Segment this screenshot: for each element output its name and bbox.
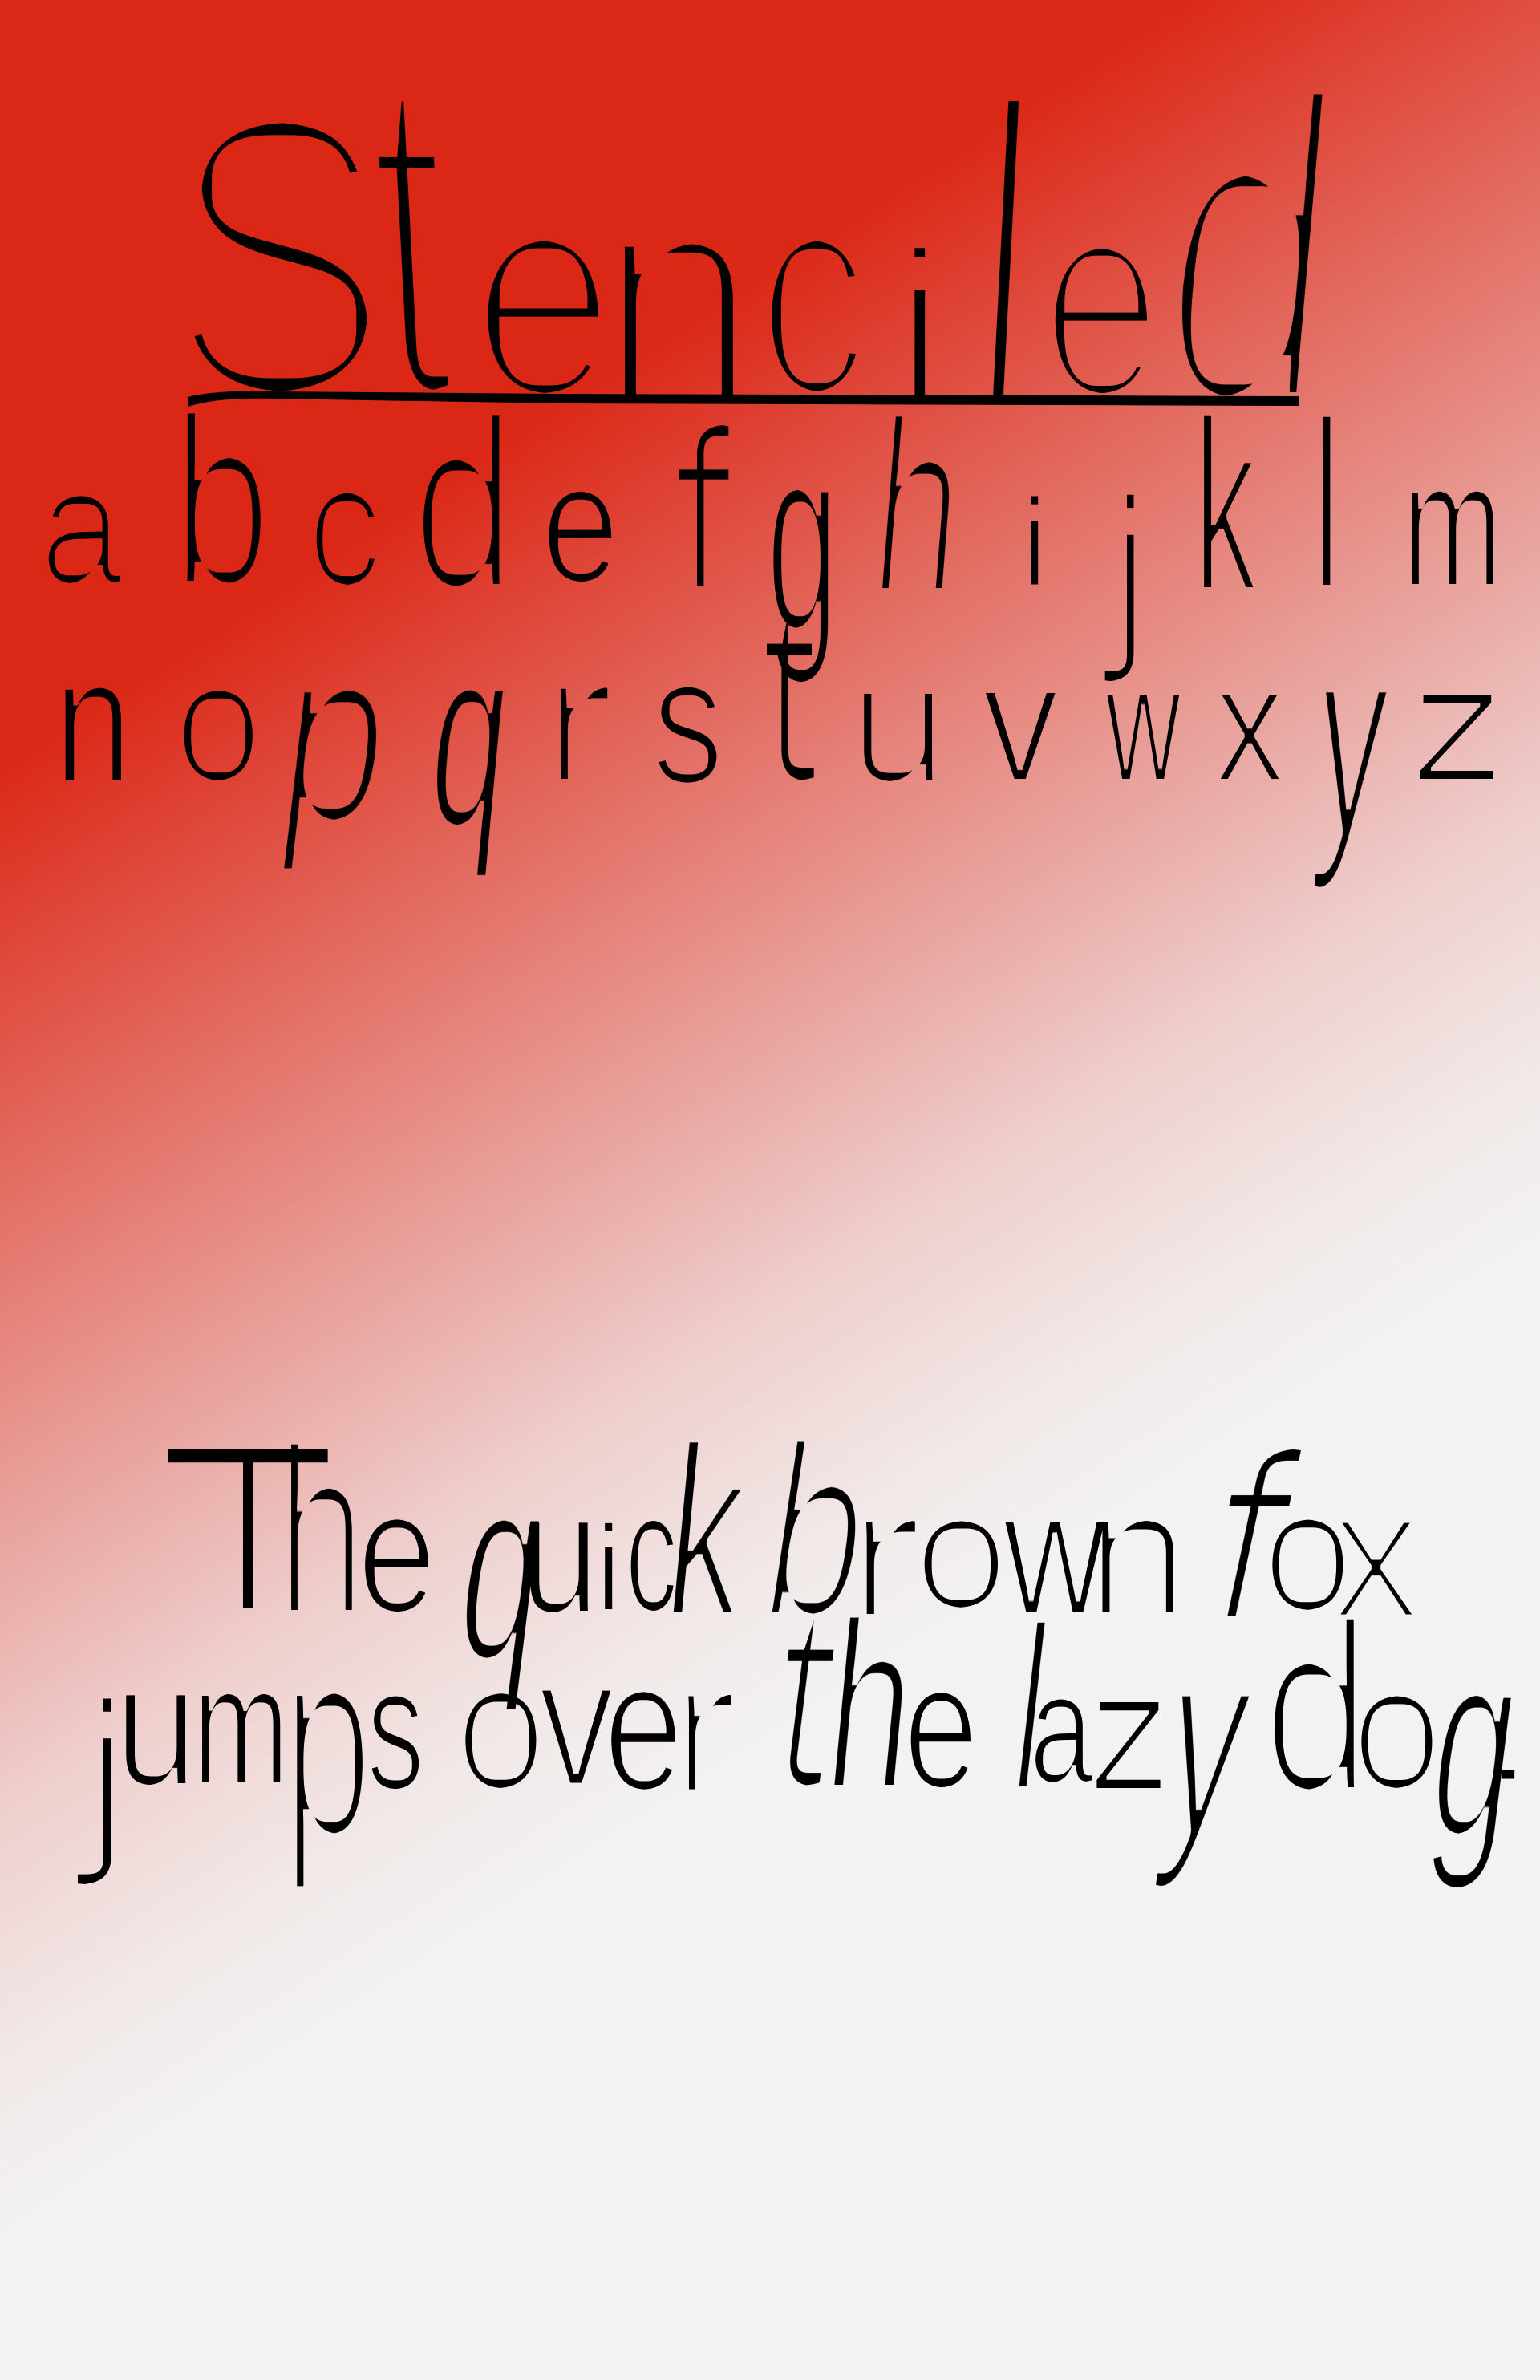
pangram line 2: jumps over the lazy dog.: d — [1261, 1575, 1372, 1841]
alphabet row: a to m: b — [171, 368, 273, 634]
alphabet row: n to z: q — [419, 595, 523, 880]
alphabet row: n to z: o — [173, 627, 263, 817]
alphabet row: a to m: e — [541, 429, 619, 618]
title underline — [188, 391, 1299, 407]
title: Stenciled: e — [470, 124, 617, 460]
alphabet row: a to m: g — [766, 391, 839, 687]
title: Stenciled: i — [889, 205, 951, 446]
pangram line 2: jumps over the lazy dog.: o — [454, 1626, 548, 1826]
pangram line 2: jumps over the lazy dog.: r — [667, 1626, 742, 1831]
title: Stenciled — [164, 0, 1361, 497]
pangram line 1: The quick brown fox: h — [276, 1401, 367, 1663]
pangram line 1: The quick brown fox: b — [748, 1396, 888, 1665]
alphabet row: n to z: u — [848, 630, 949, 817]
pangram line 2: jumps over the lazy dog.: g — [1416, 1596, 1536, 1893]
alphabet row: n to z: z — [1407, 631, 1509, 816]
pangram line 2: jumps over the lazy dog.: e — [603, 1622, 684, 1829]
alphabet row: a to m: l — [1304, 373, 1349, 639]
title: Stenciled: e — [1040, 138, 1162, 457]
alphabet row: a to m: h — [863, 371, 974, 643]
pangram line 2: jumps over the lazy dog.: z — [1085, 1637, 1173, 1826]
alphabet row: n to z: w — [1104, 631, 1182, 816]
pangram line 2: jumps over the lazy dog.: j — [67, 1660, 139, 1889]
pangram line 1: The quick brown fox: u — [519, 1457, 600, 1650]
alphabet row: n to z: s — [652, 619, 723, 822]
alphabet row: a to m: c — [306, 428, 383, 622]
pangram line 1: The quick brown fox: n — [1084, 1455, 1190, 1651]
alphabet row: a to m: d — [411, 370, 517, 638]
pangram line 2: jumps over the lazy dog. — [67, 1547, 1540, 1893]
alphabet row: n to z: y — [1308, 588, 1397, 893]
title: Stenciled: S — [164, 31, 393, 480]
pangram line 2: jumps over the lazy dog.: u — [114, 1629, 198, 1822]
alphabet row: a to m: f — [669, 382, 736, 637]
pangram line 2: jumps over the lazy dog.: a — [1029, 1640, 1093, 1816]
pangram line 2: jumps over the lazy dog.: h — [817, 1571, 926, 1838]
pangram line 2: jumps over the lazy dog.: t — [754, 1547, 858, 1843]
alphabet row: n to z: p — [265, 598, 407, 874]
pangram line 2: jumps over the lazy dog.: m — [192, 1632, 290, 1821]
pangram line 1: The quick brown fox: c — [625, 1457, 679, 1648]
pangram line 1: The quick brown fox: e — [357, 1455, 437, 1649]
pangram line 1: The quick brown fox: f — [1181, 1404, 1320, 1668]
pangram line 2: jumps over the lazy dog.: e — [903, 1625, 979, 1825]
alphabet row: a to m: m — [1402, 425, 1503, 624]
pangram line 1: The quick brown fox: q — [445, 1423, 562, 1715]
alphabet row: n to z: r — [537, 621, 619, 818]
pangram line 1: The quick brown fox: x — [1331, 1454, 1420, 1655]
pangram line 2: jumps over the lazy dog.: s — [367, 1631, 424, 1827]
pangram line 2: jumps over the lazy dog.: o — [1350, 1632, 1444, 1826]
alphabet row: a to m: a — [38, 434, 124, 618]
title: Stenciled: d — [1142, 6, 1361, 493]
alphabet row: a to m: k — [1194, 370, 1258, 642]
pangram line 1: The quick brown fox: w — [1003, 1455, 1108, 1651]
alphabet row: n to z: n — [54, 622, 132, 821]
alphabet row: n to z: t — [756, 541, 824, 837]
alphabet row: n to z: v — [982, 627, 1060, 817]
pangram line 1: The quick brown fox: r — [841, 1453, 927, 1654]
alphabet row: a to m: j — [1096, 456, 1157, 686]
pangram line 1: The quick brown fox: i — [586, 1500, 631, 1636]
pangram line 2: jumps over the lazy dog.: v — [538, 1620, 615, 1824]
alphabet row: n to z — [54, 541, 1509, 893]
alphabet row: n to z: x — [1215, 631, 1284, 817]
pangram line 1: The quick brown fox: o — [1261, 1456, 1355, 1646]
pangram line 2: jumps over the lazy dog.: l — [995, 1578, 1068, 1839]
pangram line 1: The quick brown fox: k — [656, 1398, 757, 1666]
alphabet row: a to m — [38, 368, 1503, 687]
pangram line 2: jumps over the lazy dog.: y — [1148, 1595, 1269, 1891]
alphabet row: a to m: i — [1012, 472, 1057, 613]
title: Stenciled: l — [962, 16, 1049, 497]
pangram line 1: The quick brown fox: T — [152, 1395, 345, 1661]
title: Stenciled: n — [598, 128, 759, 466]
pangram line 1: The quick brown fox: o — [913, 1459, 1010, 1643]
pangram line 1: The quick brown fox — [152, 1395, 1420, 1715]
title: Stenciled: c — [756, 126, 869, 458]
pangram line 2: jumps over the lazy dog.: p — [282, 1593, 374, 1892]
